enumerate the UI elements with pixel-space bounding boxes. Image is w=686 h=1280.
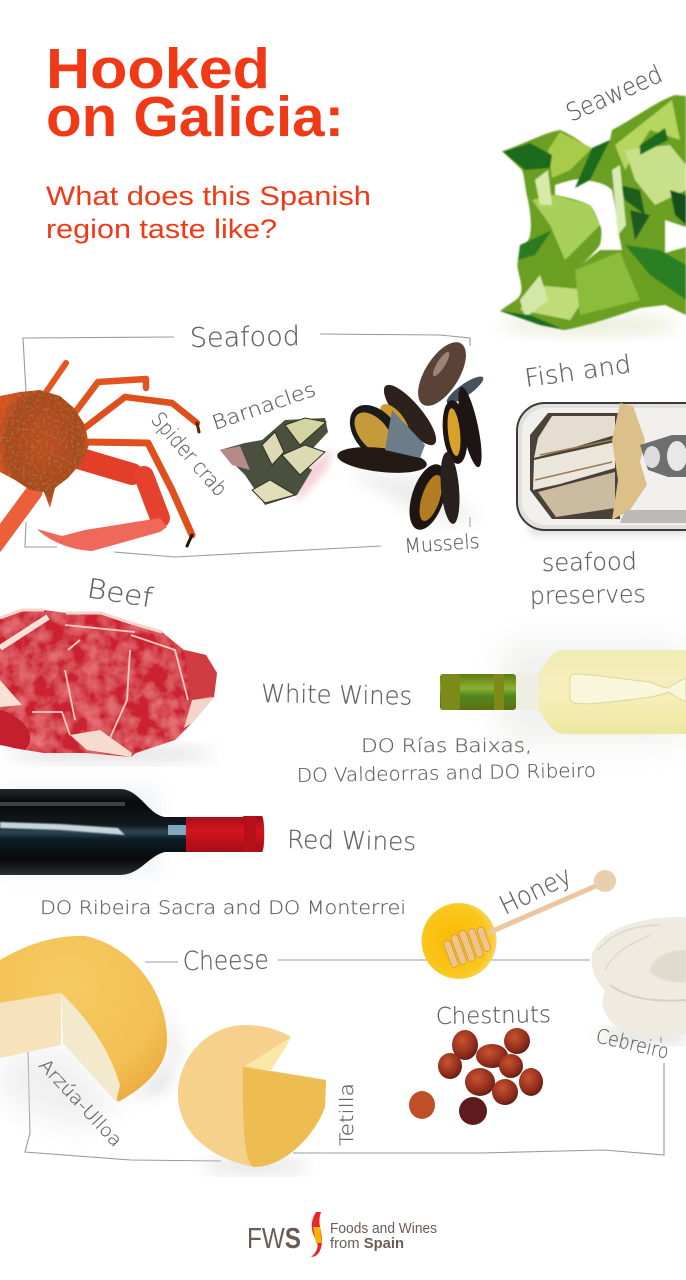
white wines label: White Wines [261,679,412,711]
title: on Galicia: [46,85,344,149]
icon: barnacles [220,418,335,505]
seaweed label: Seaweed [562,60,667,127]
subtitle: What does this Spanish [46,181,371,211]
logo: Foods and Wines from Spain [247,1212,437,1257]
icon: mussels [336,334,486,534]
icon: beef [0,610,217,761]
title: Hooked [46,37,270,101]
icon: red wine bottle [0,785,264,877]
fish label top: Fish and [523,349,633,393]
chestnuts label: Chestnuts [436,1002,551,1030]
title [46,37,344,149]
icon: white wine bottle [440,640,686,745]
fish and seafood preserves label: seafood [542,547,637,577]
logo: Foods and Wines from Spain: from Spain [330,1235,404,1252]
bracket: cheese [25,1037,664,1161]
fish and seafood preserves label [530,547,646,610]
logo: Foods and Wines from Spain: Foods and Wines [330,1220,437,1237]
subtitle [46,181,371,244]
white wines denominations: DO Rías Baixas, [361,735,532,757]
white wines denominations: DO Valdeorras and DO Ribeiro [297,760,596,787]
cheese connector line [145,960,590,962]
cheese section [0,936,671,1172]
barnacles label: Barnacles [209,377,319,435]
seafood heading: Seafood [190,321,300,354]
fish and seafood preserves label: preserves [530,580,646,610]
seafood group [0,321,486,558]
honey label: Honey [495,861,576,921]
subtitle: region taste like? [46,214,277,244]
icon: chestnuts [409,1028,543,1125]
red wines denominations: DO Ribeira Sacra and DO Monterrei [40,897,406,919]
Arzúa-Ulloa label: Arzúa-Ulloa [34,1055,126,1151]
white wines denominations [297,735,596,787]
icon: Tetilla cheese [178,1025,326,1172]
icon: Arzúa-Ulloa cheese [0,936,180,1130]
Cebreiro label: Cebreiro [594,1023,671,1064]
Tetilla label: Tetilla [336,1083,358,1146]
logo: Foods and Wines from Spain: FWS [247,1223,301,1255]
icon: honey with dipper [422,870,616,979]
cheese heading: Cheese [183,946,269,977]
beef label: Beef [85,573,155,614]
icon: Cebreiro cheese [592,917,686,1042]
spider crab label: Spider crab [146,408,232,501]
bracket: seafood [23,334,470,557]
icon: spider crab [0,363,199,551]
icon: sardine can [517,403,686,535]
red wines label: Red Wines [287,825,416,856]
icon: seaweed [500,95,686,334]
mussels label: Mussels [404,529,480,558]
